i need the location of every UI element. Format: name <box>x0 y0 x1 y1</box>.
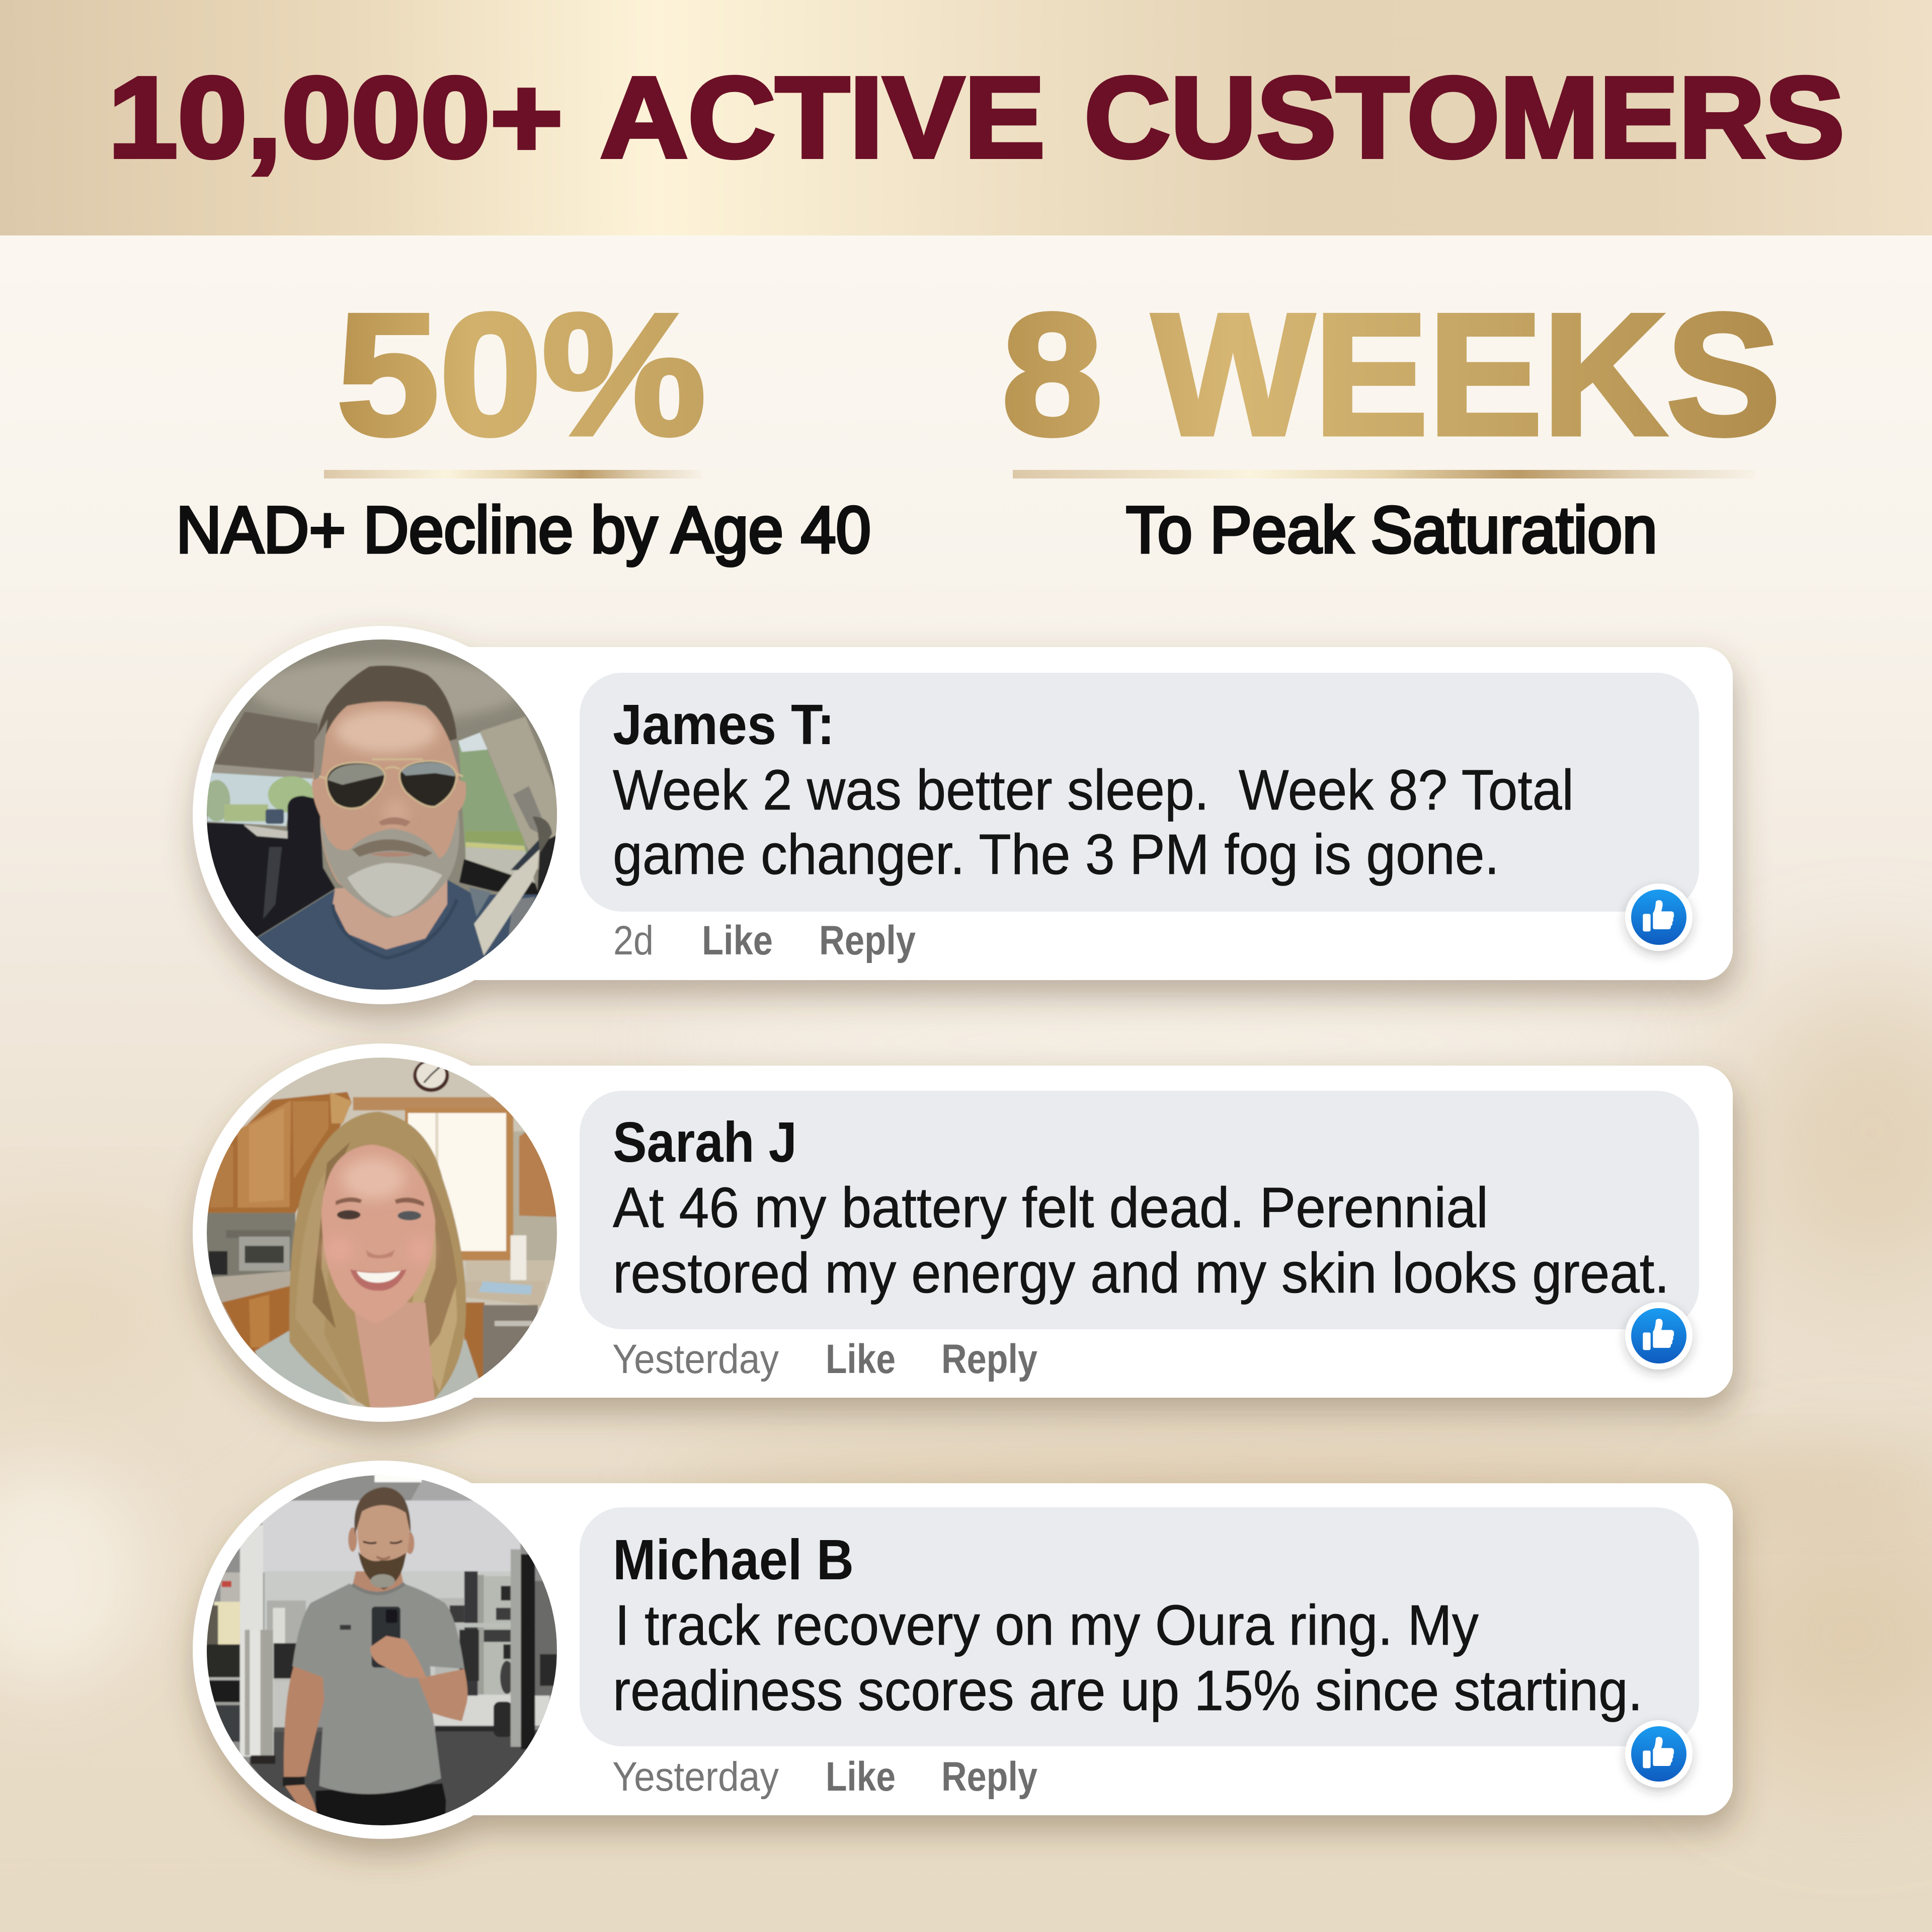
comment actions: Like <box>826 1754 896 1800</box>
comment actions: Reply <box>819 918 916 963</box>
comment actions: Yesterday <box>612 1336 779 1382</box>
stat divider <box>1013 470 1756 478</box>
comment actions <box>612 1754 1037 1800</box>
comment text: Week 2 was better sleep. Week 8? Total <box>613 758 1574 822</box>
avatar photo: man in car with sunglasses <box>207 639 557 990</box>
stat: 8 weeks to peak saturation <box>1002 278 1781 567</box>
avatar photo: man gym mirror selfie <box>191 1459 574 1841</box>
comment actions <box>612 1336 1037 1382</box>
card with avatar ring <box>193 1461 1733 1839</box>
comment actions: Like <box>702 918 773 963</box>
comment actions: Reply <box>941 1336 1037 1382</box>
comment actions: 2d <box>613 918 654 963</box>
comment actions: Yesterday <box>612 1754 779 1800</box>
comment actions: Reply <box>941 1754 1037 1800</box>
title: ACTIVE <box>600 54 1045 182</box>
stat number: 8 WEEKS: WEEKS <box>1152 278 1781 471</box>
stat divider <box>324 470 702 478</box>
comment bubble <box>580 1091 1699 1329</box>
card with avatar ring <box>193 1043 1733 1422</box>
commenter name: James T: <box>613 693 835 756</box>
stat label: NAD+ Decline by Age 40 <box>176 493 871 567</box>
card with avatar ring <box>193 626 1733 1004</box>
header band <box>0 0 1932 235</box>
icon: like badge <box>1625 883 1693 951</box>
comment actions: Like <box>826 1336 896 1382</box>
comment text: readiness scores are up 15% since starting. <box>613 1659 1643 1722</box>
icon: like badge <box>1625 1302 1693 1370</box>
stat number: 50%: 50% <box>337 278 706 471</box>
stat label: To Peak Saturation <box>1126 493 1657 567</box>
comment text: I track recovery on my Oura ring. My <box>615 1593 1479 1657</box>
comment bubble <box>580 1507 1699 1746</box>
commenter name: Sarah J <box>613 1110 797 1174</box>
comment text <box>613 758 1574 886</box>
comment text <box>613 1176 1669 1305</box>
comment text <box>613 1593 1643 1722</box>
comment text: game changer. The 3 PM fog is gone. <box>613 823 1499 886</box>
panel: testimonial Sarah J <box>193 1043 1733 1429</box>
title: 10,000+ <box>108 54 563 182</box>
comment text: restored my energy and my skin looks great. <box>613 1241 1669 1305</box>
comment actions <box>613 918 916 963</box>
title <box>108 54 1844 182</box>
stat number: 8 WEEKS: 8 <box>1002 278 1103 471</box>
stat: 50% NAD+ decline <box>176 278 871 567</box>
commenter name: Michael B <box>613 1528 854 1591</box>
icon: like badge <box>1625 1720 1693 1788</box>
comment text: At 46 my battery felt dead. Perennial <box>613 1176 1488 1239</box>
avatar photo: woman in kitchen <box>194 1047 570 1429</box>
title: CUSTOMERS <box>1084 54 1844 182</box>
panel: testimonial Michael B <box>191 1459 1733 1841</box>
comment bubble <box>580 673 1699 912</box>
panel: testimonial James T <box>191 624 1733 1006</box>
